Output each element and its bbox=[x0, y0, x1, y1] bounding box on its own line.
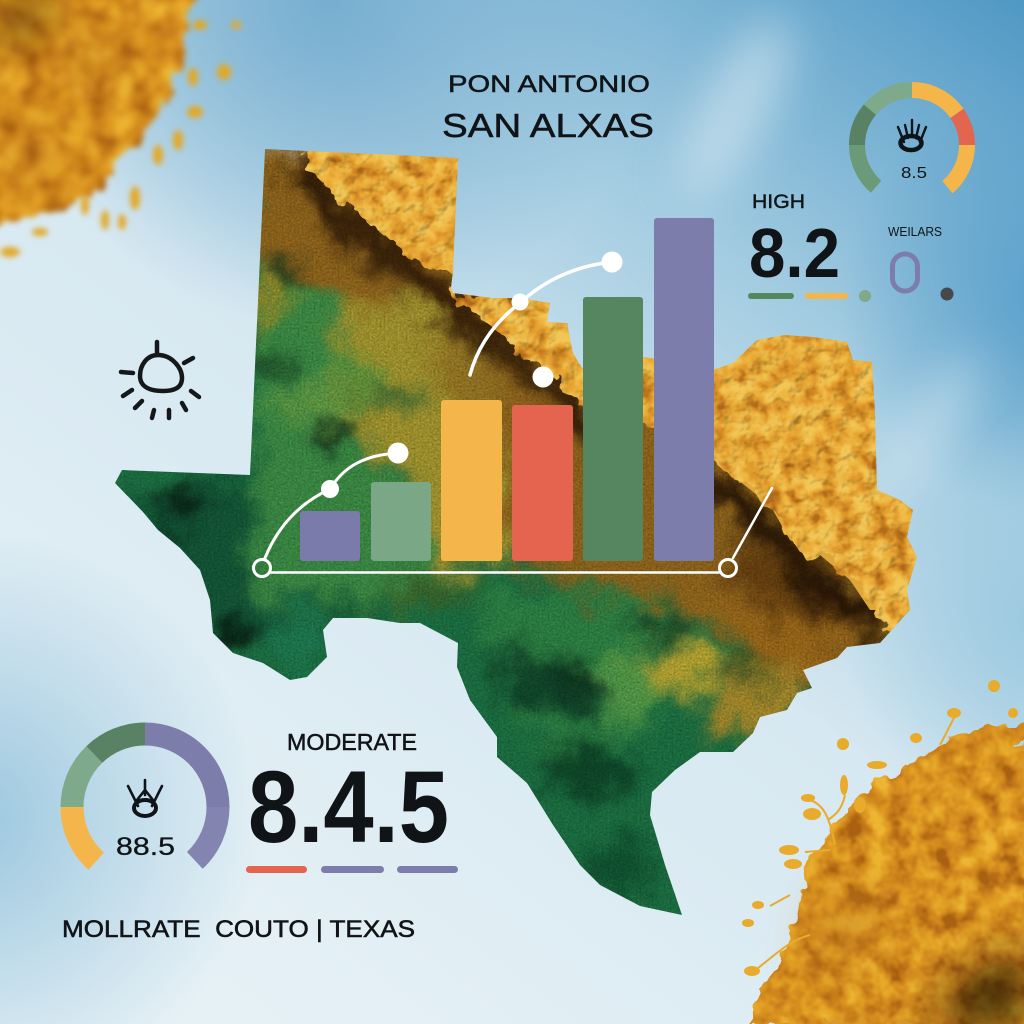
icon: hand symbol bbox=[898, 120, 926, 150]
map yellow clumps bbox=[307, 149, 925, 640]
stat: high: HIGH bbox=[752, 192, 805, 213]
map grain texture bbox=[100, 140, 930, 930]
stat: high: 8.2 bbox=[749, 214, 840, 292]
footer label: MOLLRATE COUTO | TEXAS bbox=[62, 916, 415, 943]
gauge: bottom left: 88.5 bbox=[116, 833, 175, 861]
gauge: top right bbox=[857, 90, 967, 187]
small pollen specks and tendrils bbox=[742, 680, 1018, 976]
title: PON ANTONIO bbox=[448, 71, 650, 98]
stat: high bbox=[748, 192, 871, 302]
title bbox=[442, 71, 654, 144]
icon: hand symbol bbox=[128, 780, 162, 816]
decorative pollen cluster: top left bbox=[0, 0, 241, 257]
gauge: bottom left bbox=[72, 734, 218, 861]
map colour wash bbox=[100, 140, 930, 930]
chart axis and trend lines bbox=[254, 252, 772, 576]
stat: weilars: WEILARS bbox=[888, 224, 942, 239]
title: SAN ALXAS bbox=[442, 107, 654, 144]
stat: moderate: 8.4.5 bbox=[248, 750, 449, 864]
gauge: top right: 8.5 bbox=[901, 165, 927, 182]
bar chart bbox=[300, 218, 714, 561]
icon: sun bbox=[121, 342, 199, 418]
decorative pollen cluster: bottom right bbox=[742, 680, 1024, 1024]
stat: weilars bbox=[888, 224, 954, 300]
stat: moderate: MODERATE bbox=[287, 729, 417, 755]
small pollen specks bbox=[0, 20, 241, 257]
Texas map bbox=[100, 140, 930, 930]
